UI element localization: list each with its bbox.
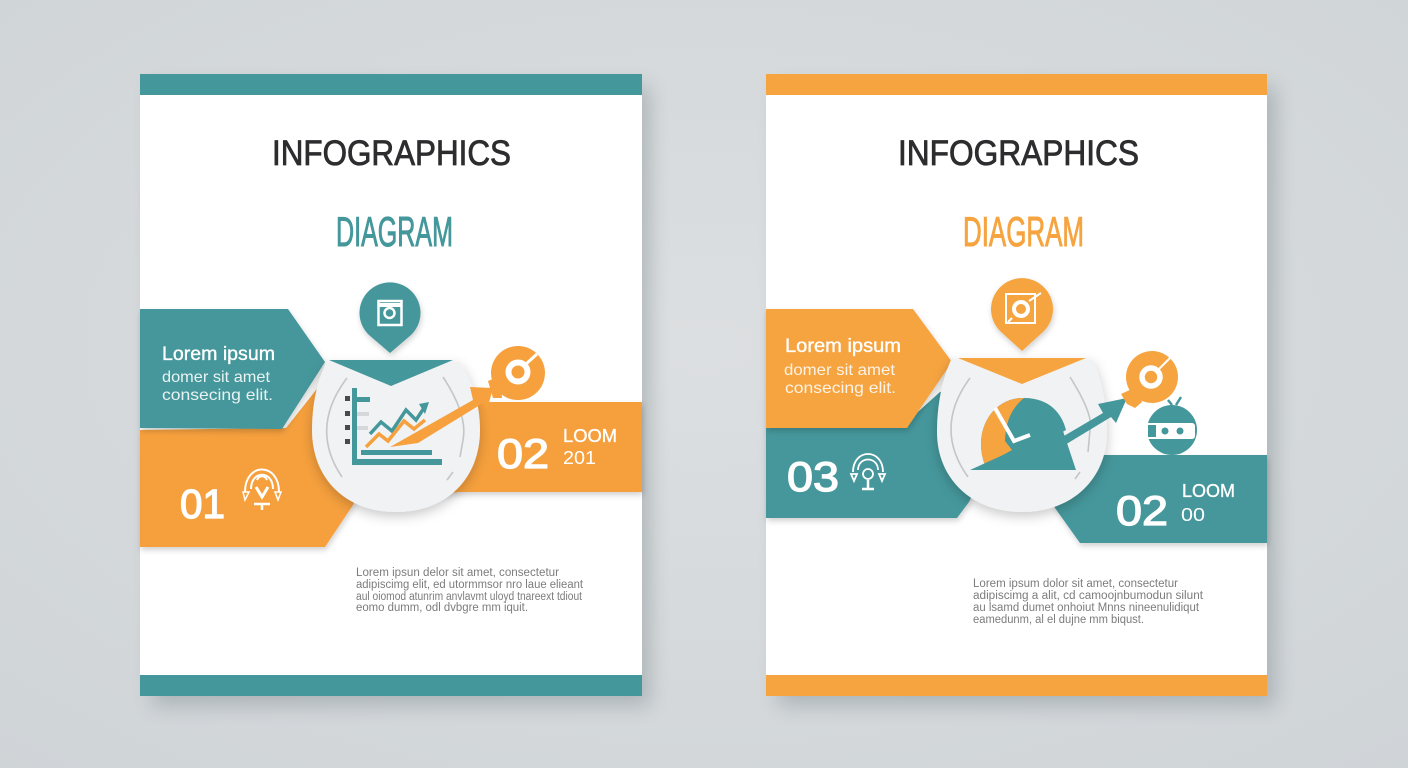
hexagon text	[162, 344, 275, 404]
title: infographics: INFOGRAPHICS	[272, 134, 511, 173]
top bar: orange	[766, 74, 1267, 95]
body text: eomo dumm, odl dvbgre mm iquit.	[356, 602, 528, 614]
hexagon text: consecing elit.	[162, 387, 273, 404]
icon: orange target	[488, 346, 545, 400]
bottom bar: orange	[766, 675, 1267, 696]
icon: signal pin	[243, 470, 281, 510]
hexagon text: domer sit amet	[162, 369, 271, 386]
banner: orange chevron	[958, 358, 1086, 384]
icon: teal camera pin	[359, 282, 420, 353]
icon: signal pin	[851, 454, 885, 489]
chart: rising lines	[345, 388, 442, 465]
number 01: 01	[180, 481, 225, 527]
label: 02 loom 00: 00	[1181, 505, 1205, 525]
body text: Lorem ipsum dolor sit amet, consectetur	[973, 578, 1178, 590]
label: 02 loom 00: 02	[1116, 487, 1168, 534]
label: 02 loom 201	[497, 426, 617, 477]
ribbon: teal hexagon	[140, 309, 325, 429]
bottom bar: teal	[140, 675, 642, 696]
title: infographics: INFOGRAPHICS	[898, 134, 1139, 173]
body text: au lsamd dumet onhoiut Mnns nineenulidiqut	[973, 602, 1200, 614]
arrow: teal	[1018, 398, 1127, 463]
subtitle: diagram: DIAGRAM	[336, 208, 453, 255]
number 03: 03	[787, 453, 839, 500]
label: 02 loom 00	[1116, 481, 1235, 534]
ribbon: orange right	[380, 402, 642, 500]
label: 02 loom 201: 02	[497, 430, 549, 477]
hexagon text	[784, 336, 901, 397]
chart: gauge	[970, 398, 1076, 470]
ribbon: orange left	[140, 385, 400, 547]
hexagon text: domer sit amet	[784, 362, 896, 379]
ribbon: orange hexagon	[766, 309, 952, 428]
body text: aul oiomod atunrim anvlavmt uloyd tnareext tdiout	[356, 591, 583, 603]
hexagon text: Lorem ipsum	[785, 336, 901, 357]
subtitle: diagram: DIAGRAM	[963, 208, 1084, 255]
ribbon: teal lower right	[1040, 455, 1267, 543]
body text: Lorem ipsun delor sit amet, consectetur	[356, 567, 559, 579]
body text: eamedunm, al el dujne mm biqust.	[973, 614, 1144, 626]
top bar: teal	[140, 74, 642, 95]
body text: adipiscimg elit, ed utormmsor nro laue elieant	[356, 579, 584, 591]
central badge	[312, 360, 480, 512]
icon: orange target pin	[991, 278, 1053, 351]
body text: adipiscimg a alit, cd camoojnbumodun silunt	[973, 590, 1204, 602]
label: 02 loom 00: LOOM	[1182, 481, 1235, 501]
ribbon: teal left	[766, 392, 1020, 518]
label: 02 loom 201: 201	[563, 448, 596, 468]
arrow: orange	[390, 387, 493, 447]
icon: teal robot	[1145, 397, 1197, 455]
panel: left teal infographic	[140, 74, 650, 706]
body text	[973, 578, 1204, 626]
label: 02 loom 201: LOOM	[563, 426, 617, 446]
banner: teal chevron	[329, 360, 453, 386]
central badge	[937, 358, 1107, 512]
body text	[356, 567, 584, 614]
hexagon text: consecing elit.	[785, 380, 896, 397]
panel: right orange infographic	[766, 74, 1276, 706]
hexagon text: Lorem ipsum	[162, 344, 275, 365]
icon: orange target	[1121, 351, 1178, 408]
